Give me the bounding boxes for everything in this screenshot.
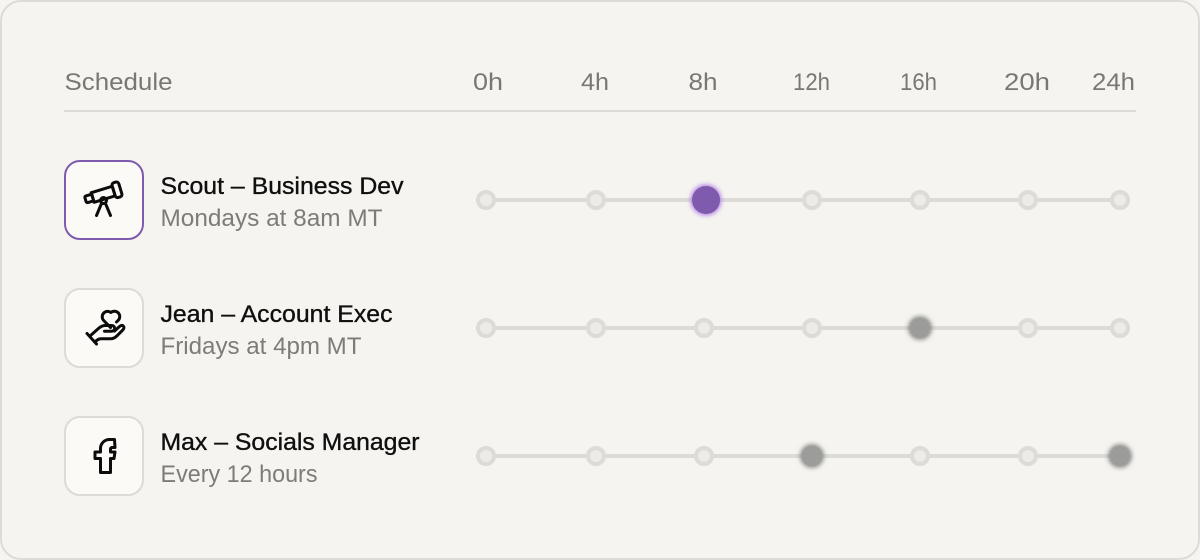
text: Scout schedule: Mondays at 8am MT (160, 205, 383, 232)
icon: telescope (65, 161, 143, 239)
row: Max (65, 417, 1132, 495)
heading: schedule: Schedule (64, 69, 172, 96)
hour axis labels: 4h (581, 69, 609, 96)
text: Scout title: Scout – Business Dev (160, 173, 404, 200)
hour axis labels: 16h (900, 69, 937, 96)
hour axis labels: 8h (688, 69, 718, 96)
hour axis labels: 12h (793, 69, 830, 96)
row: Scout (65, 161, 1128, 239)
text: Max title: Max – Socials Manager (160, 429, 420, 456)
timeline: Max (478, 444, 1132, 468)
text: Max schedule: Every 12 hours (160, 461, 318, 488)
hour axis labels: 0h (473, 69, 503, 96)
hour axis labels: 24h (1092, 69, 1135, 96)
hour axis labels (473, 69, 1135, 96)
timeline: Scout (478, 184, 1128, 216)
hour axis labels: 20h (1004, 69, 1050, 96)
icon: hand holding heart (65, 289, 143, 367)
text: Jean title: Jean – Account Exec (160, 301, 392, 328)
timeline: Jean (478, 316, 1128, 340)
icon: facebook (65, 417, 143, 495)
row: Jean (65, 289, 1128, 367)
text: Jean schedule: Fridays at 4pm MT (160, 333, 362, 360)
